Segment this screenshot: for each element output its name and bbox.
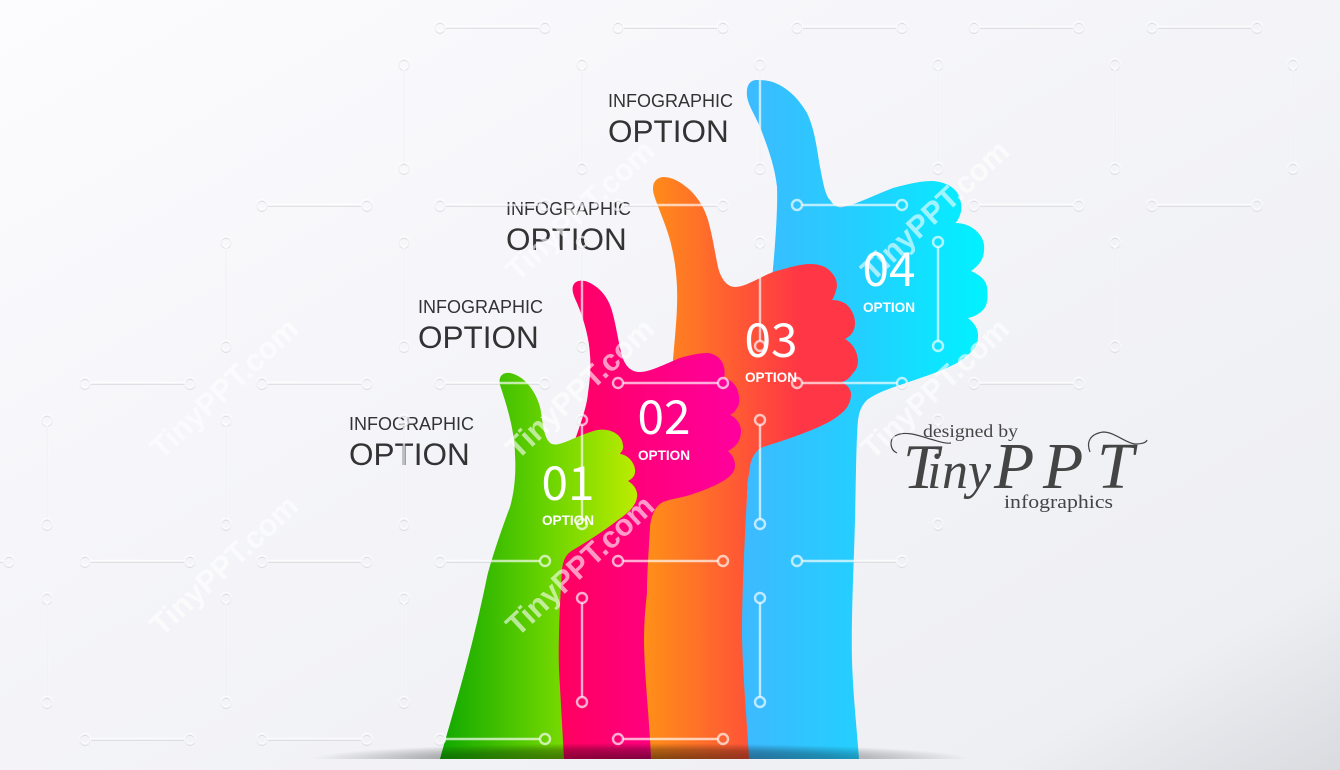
label: option 2 heading: OPTION (418, 319, 539, 355)
label: option 1 heading: OPTION (349, 436, 470, 472)
label: option 2 heading (418, 297, 543, 355)
number: 01: OPTION (542, 513, 594, 528)
watermarks: TinyPPT.com (499, 312, 661, 466)
number: 04: 04 (862, 231, 916, 300)
logo: designed by TinyPPT infographics: T (1097, 430, 1138, 503)
watermarks (143, 134, 1016, 643)
number: 01: 01 (542, 445, 594, 514)
label: option 4 heading (608, 91, 733, 149)
label: option 2 heading: INFOGRAPHIC (418, 297, 543, 317)
hand 01: green (440, 373, 637, 759)
number: 04: OPTION (863, 300, 915, 315)
hand 02: pink (540, 281, 741, 759)
label: option 3 heading: INFOGRAPHIC (506, 199, 631, 219)
number: 03: OPTION (745, 370, 797, 385)
watermarks: TinyPPT.com (854, 312, 1016, 466)
number: 03: 03 (744, 302, 798, 371)
watermarks: TinyPPT.com (854, 134, 1016, 288)
label: option 4 heading: OPTION (608, 113, 729, 149)
logo: designed by TinyPPT infographics (891, 421, 1147, 513)
logo: designed by TinyPPT infographics: P (993, 430, 1034, 503)
watermarks: TinyPPT.com (143, 489, 305, 643)
hand 03: orange to red (636, 177, 858, 759)
number: 02: OPTION (638, 448, 690, 463)
label: option 4 heading: INFOGRAPHIC (608, 91, 733, 111)
logo: designed by TinyPPT infographics: i (927, 443, 941, 500)
label: option 3 heading (506, 199, 631, 257)
watermarks: TinyPPT.com (143, 312, 305, 466)
logo: designed by TinyPPT infographics: designed by (923, 421, 1018, 441)
watermarks: TinyPPT.com (499, 489, 661, 643)
logo: designed by TinyPPT infographics: y (963, 443, 992, 500)
infographic: four thumbs-up hands (440, 80, 988, 759)
number: 02: 02 (638, 379, 690, 448)
label: option 1 heading: INFOGRAPHIC (349, 414, 474, 434)
floor shadow (326, 744, 954, 759)
label: option 3 heading: OPTION (506, 221, 627, 257)
hand 04: blue (730, 80, 988, 759)
label: option 1 heading (349, 414, 474, 472)
logo: designed by TinyPPT infographics: T (903, 431, 943, 502)
logo: designed by TinyPPT infographics: P (1042, 430, 1083, 503)
watermarks: TinyPPT.com (499, 134, 661, 288)
logo: designed by TinyPPT infographics: n (942, 443, 968, 500)
logo: designed by TinyPPT infographics: infographics (1004, 492, 1113, 513)
